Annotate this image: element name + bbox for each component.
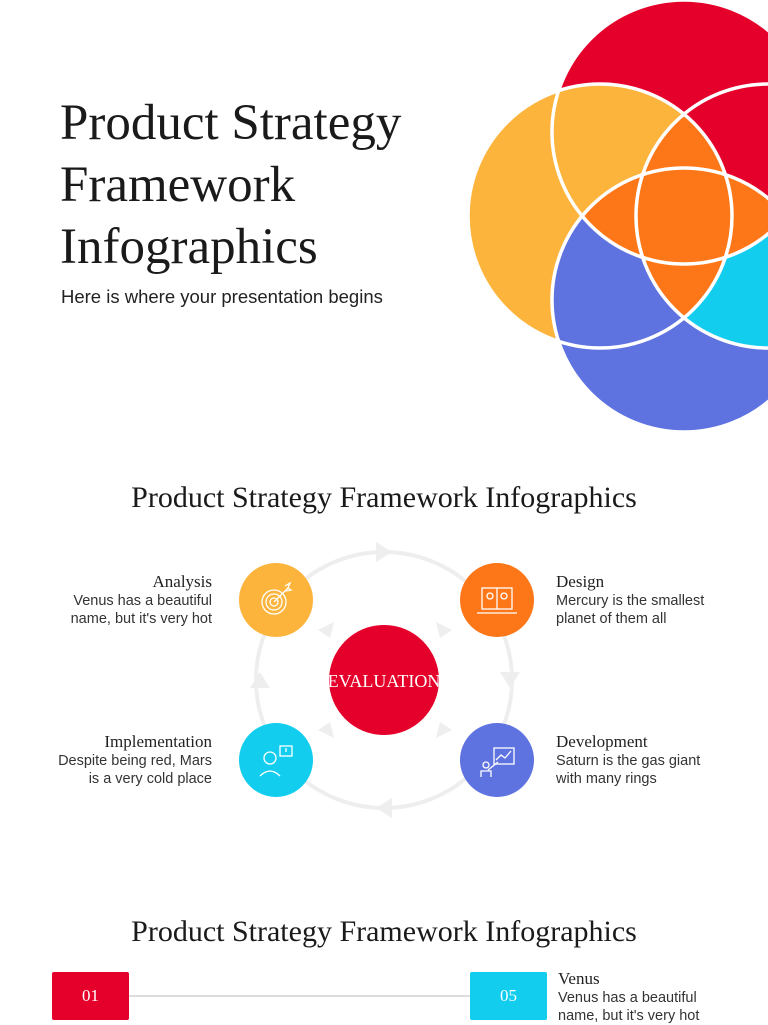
title: Infographics (60, 219, 318, 275)
center: evaluation (328, 625, 440, 735)
text: development: Saturn is the gas giant (556, 753, 700, 769)
title: Product Strategy (60, 95, 401, 151)
box 05 (470, 972, 547, 1020)
text: venus (558, 969, 700, 1024)
text: implementation: is a very cold place (89, 771, 212, 787)
text: design: planet of them all (556, 611, 666, 627)
text: analysis: Analysis (152, 572, 212, 591)
section 3 heading: Product Strategy Framework Infographics (131, 915, 637, 948)
subtitle: Here is where your presentation begins (61, 286, 383, 307)
text: venus: name, but it's very hot (558, 1008, 699, 1024)
text: design: Design (556, 572, 604, 591)
text: implementation: Implementation (104, 732, 212, 751)
text: design (556, 572, 704, 627)
center: evaluation: EVALUATION (328, 671, 440, 691)
icon: implementation person (239, 723, 313, 797)
box 05: 05 (500, 986, 517, 1005)
text: analysis: Venus has a beautiful (73, 593, 212, 609)
text: implementation (58, 732, 212, 787)
text: development: Development (556, 732, 648, 751)
venn diagram (470, 2, 768, 430)
text: design: Mercury is the smallest (556, 593, 704, 609)
text: analysis: name, but it's very hot (71, 611, 212, 627)
section 2 heading: Product Strategy Framework Infographics (131, 481, 637, 514)
title: Framework (60, 157, 295, 213)
text: venus: Venus (558, 969, 600, 988)
connector line (128, 995, 470, 997)
cycle diagram (239, 542, 534, 818)
box 01 (52, 972, 129, 1020)
box 01: 01 (82, 986, 99, 1005)
title (60, 95, 402, 275)
text: analysis (71, 572, 212, 627)
text: venus: Venus has a beautiful (558, 990, 697, 1006)
icon: analysis target (239, 563, 313, 637)
icon: design laptop (460, 563, 534, 637)
text: development: with many rings (556, 771, 657, 787)
text: implementation: Despite being red, Mars (58, 753, 212, 769)
text: development (556, 732, 700, 787)
icon: development chart (460, 723, 534, 797)
